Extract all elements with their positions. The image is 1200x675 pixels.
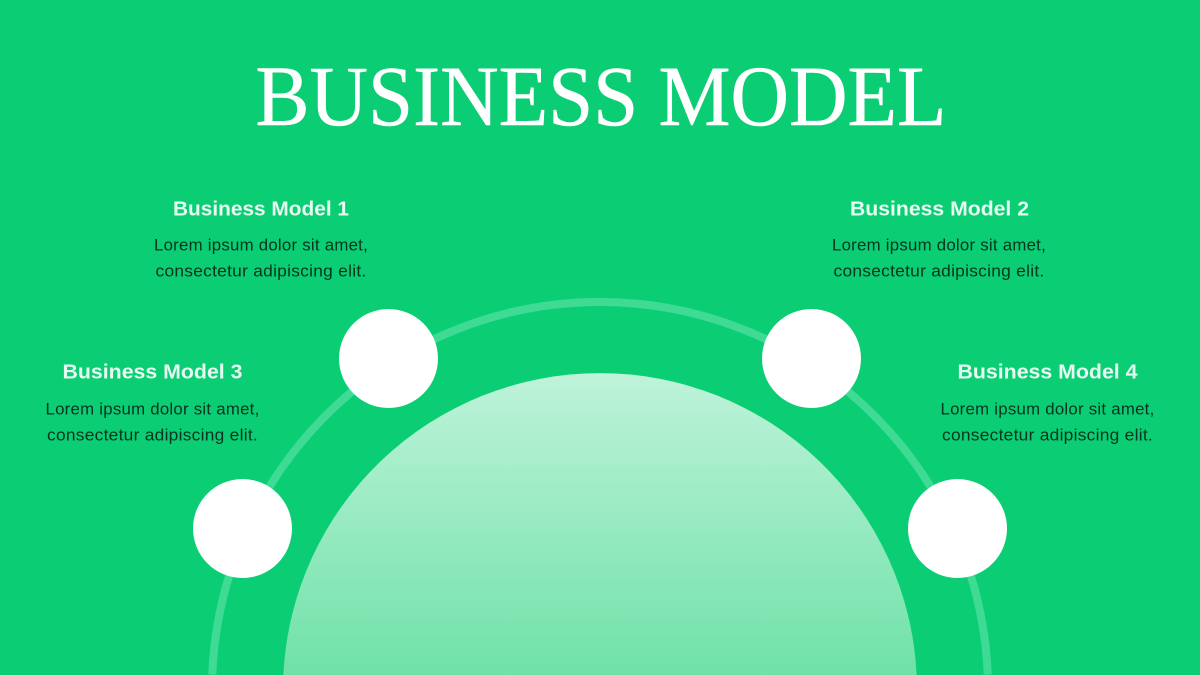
heading: business model 2: Business Model 2 (850, 198, 1029, 220)
node: business model 4 (908, 479, 1007, 578)
outer ring arc (212, 302, 988, 674)
body: business model 3 (46, 400, 260, 444)
body: business model 4 (940, 400, 1154, 444)
node: business model 2 (762, 309, 861, 408)
title: BUSINESS MODEL (256, 48, 946, 144)
body: business model 3: Lorem ipsum dolor sit amet, (46, 400, 260, 418)
text block: business model 4 (940, 360, 1154, 444)
central semicircle (283, 373, 917, 675)
body: business model 1: Lorem ipsum dolor sit amet, (154, 236, 368, 254)
body: business model 2: Lorem ipsum dolor sit amet, (832, 236, 1046, 254)
heading: business model 1: Business Model 1 (173, 198, 349, 220)
text block: business model 3 (46, 360, 260, 444)
body: business model 1: consectetur adipiscing elit. (156, 262, 366, 280)
node: business model 1 (339, 309, 438, 408)
text block: business model 2 (832, 198, 1046, 280)
body: business model 2: consectetur adipiscing elit. (834, 262, 1044, 280)
heading: business model 3: Business Model 3 (62, 360, 242, 384)
body: business model 3: consectetur adipiscing elit. (47, 426, 258, 444)
body: business model 4: consectetur adipiscing elit. (942, 426, 1153, 444)
text block: business model 1 (154, 198, 368, 280)
node: business model 3 (193, 479, 292, 578)
heading: business model 4: Business Model 4 (958, 360, 1138, 384)
body: business model 4: Lorem ipsum dolor sit amet, (940, 400, 1154, 418)
body: business model 2 (832, 236, 1046, 280)
body: business model 1 (154, 236, 368, 280)
